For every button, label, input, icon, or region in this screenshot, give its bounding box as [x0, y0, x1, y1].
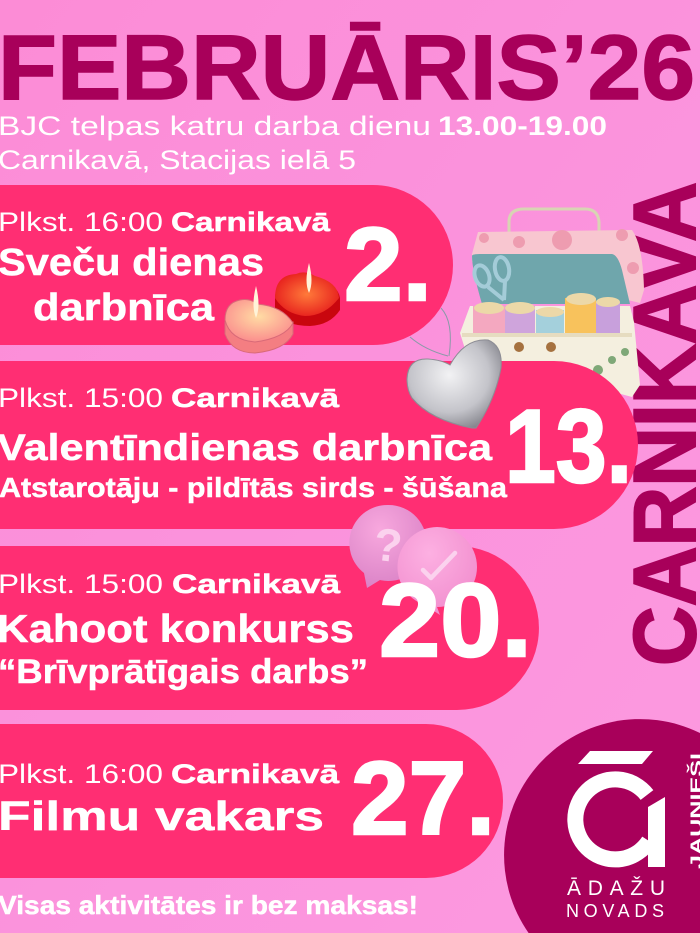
- event 3 time: Carnikavā: [172, 569, 341, 599]
- event 3 time: [0, 569, 341, 599]
- footer note: Visas aktivitātes ir bez maksas!: [0, 890, 418, 920]
- event 1 date: 2.: [344, 207, 432, 323]
- event 3 title: [0, 608, 368, 691]
- event 2 pill: [0, 361, 638, 529]
- icon: silver heart: [407, 308, 501, 428]
- event 4 time: Plkst. 16:00: [0, 759, 163, 789]
- logo text: ĀDAŽU: [567, 877, 665, 900]
- event 4 time: Carnikavā: [171, 759, 340, 789]
- event 2 subtitle: Atstarotāju - pildītās sirds - šūšana: [0, 472, 507, 503]
- opening hours text: BJC telpas katru darba dienu: [0, 111, 431, 141]
- icon: candles: [225, 263, 340, 353]
- event 4 time: [0, 759, 340, 789]
- event 4 date: 27.: [351, 741, 495, 857]
- logo badge: [504, 719, 700, 933]
- event 2 time: [0, 383, 340, 413]
- event 3 pill: [0, 546, 539, 710]
- event 2 time: Plkst. 15:00: [0, 383, 163, 413]
- event 3 time: Plkst. 15:00: [0, 569, 163, 599]
- icon: sewing box: [460, 209, 644, 397]
- event 4 title: Filmu vakars: [0, 793, 324, 839]
- opening hours text: [0, 111, 607, 175]
- logo mark: [575, 751, 665, 867]
- event 1 pill: [0, 185, 453, 345]
- event 1 time: [0, 207, 331, 237]
- event 1 title: darbnīca: [33, 287, 215, 329]
- icon: speech bubbles: [349, 505, 477, 615]
- title: FEBRUĀRIS’26: [0, 17, 695, 119]
- event 1 title: Sveču dienas: [0, 242, 264, 284]
- logo text: NOVADS: [566, 901, 664, 921]
- opening hours text: 13.00-19.00: [438, 111, 607, 141]
- icon: speech bubbles: ?: [371, 518, 405, 572]
- event 1 time: Plkst. 16:00: [0, 207, 163, 237]
- event 4 pill: [0, 724, 503, 878]
- event 1 time: Carnikavā: [171, 207, 331, 237]
- event 2 title: Valentīndienas darbnīca: [0, 427, 492, 468]
- event 2 time: Carnikavā: [171, 383, 340, 413]
- event 3 title: Kahoot konkurss: [0, 608, 354, 651]
- logo text: [566, 877, 665, 921]
- event 2 date: 13.: [505, 389, 632, 505]
- event 3 title: “Brīvprātīgais darbs”: [0, 653, 368, 691]
- event 1 title: [0, 242, 264, 329]
- opening hours text: Carnikavā, Stacijas ielā 5: [0, 145, 356, 175]
- event 3 date: 20.: [379, 563, 532, 679]
